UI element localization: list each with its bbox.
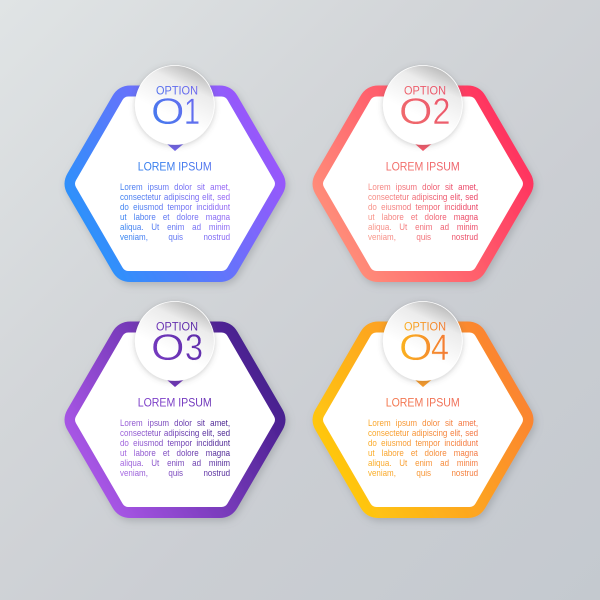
body text [120, 182, 230, 242]
option label: OPTION [156, 84, 198, 98]
option number [398, 91, 450, 132]
option number: 2 [432, 91, 450, 132]
option label: OPTION [156, 320, 198, 334]
pointer triangle [414, 144, 432, 151]
option number: O [398, 327, 432, 368]
hexagon frame [64, 322, 286, 518]
option number: 1 [184, 91, 200, 132]
hexagon white panel [322, 96, 522, 271]
hexagon white panel [75, 332, 275, 507]
hexagon frame [312, 86, 533, 282]
heading: LOREM IPSUM [138, 160, 212, 174]
badge circle [383, 302, 462, 380]
pointer triangle [166, 144, 184, 151]
body text [368, 418, 478, 478]
option number [151, 327, 203, 368]
card: option 3 [64, 300, 290, 524]
badge circle [135, 66, 214, 144]
badge circle [135, 302, 214, 380]
card: option 1 [64, 64, 290, 288]
pointer triangle [414, 380, 432, 387]
hexagon white panel [322, 332, 522, 507]
badge circle [383, 66, 462, 144]
hexagon frame [312, 322, 533, 518]
card: option 2 [312, 64, 538, 288]
body text [368, 182, 478, 242]
heading: LOREM IPSUM [138, 396, 212, 410]
option number: O [151, 327, 184, 368]
card: option 4 [312, 300, 538, 524]
option number: 3 [185, 327, 203, 368]
option number [151, 91, 200, 132]
option label: OPTION [404, 320, 446, 334]
option number: O [151, 91, 184, 132]
pointer triangle [166, 380, 184, 387]
option number [398, 327, 448, 368]
option label: OPTION [404, 84, 446, 98]
hexagon white panel [75, 96, 275, 271]
body text [120, 418, 230, 478]
heading: LOREM IPSUM [385, 396, 459, 410]
hexagon frame [64, 86, 286, 282]
heading: LOREM IPSUM [385, 160, 459, 174]
option number: O [398, 91, 432, 132]
option number: 4 [430, 327, 448, 368]
